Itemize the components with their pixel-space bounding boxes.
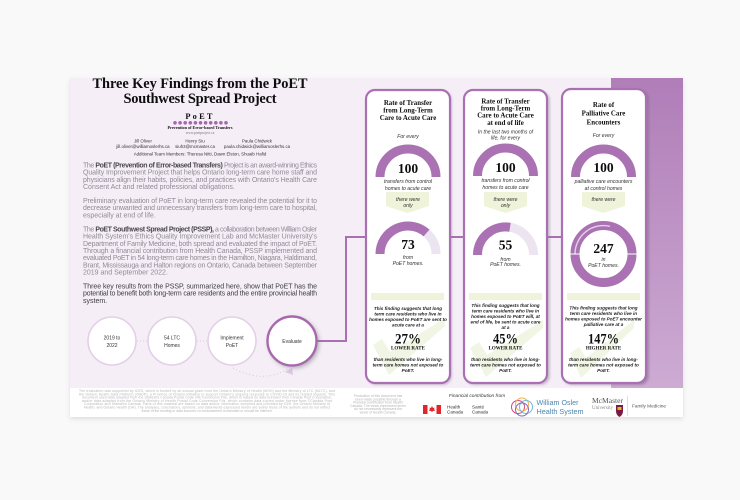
card 2 heading: Rate of Transfer — [481, 98, 530, 106]
key results paragraph: Three key results from the PSSP, summarized here, show that PoET has the — [83, 284, 317, 290]
Health Canada wordmark — [447, 404, 489, 414]
PSSP paragraph: Health System's Ethics Quality Improvement Lab and McMaster University's — [83, 234, 318, 241]
PoET logo: Prevention of Error-based Transfers — [167, 125, 233, 130]
gauge: 247 in PoET homes: 247 — [593, 241, 614, 256]
Health Canada wordmark: Canada — [472, 410, 489, 414]
card 2: transfer at end of life: homes to acute care — [482, 185, 529, 191]
production note: Canada. The views expressed herein — [350, 404, 406, 408]
production note — [350, 394, 406, 414]
funding disclaimer: document used data adapted from the Statistics Canada Postal Code OM Conversion File, which is based on data licensed from Canada Post Corporation, — [82, 396, 332, 400]
chevron: there were only — [484, 192, 527, 213]
card 3: palliative care encounters: For every — [593, 133, 615, 139]
logo: William Osler Health System: William Osler — [536, 398, 579, 407]
preliminary evaluation paragraph — [83, 198, 317, 219]
funding disclaimer: Corporation and Statistics Canada. Parts of this material are based on data and/or information compiled and provided by CIHI, the Ontario Ministry of — [84, 402, 330, 406]
intro paragraph — [83, 162, 318, 191]
team members: Jill Oliver — [134, 138, 152, 144]
card 2 heading: from Long-Term — [481, 106, 531, 112]
step: implement PoET: Implement — [220, 336, 244, 342]
stat: 147% higher rate: HIGHER RATE — [586, 346, 622, 352]
gauge: 100 control transfers — [380, 149, 436, 177]
finding text: term care residents who live in — [472, 308, 539, 314]
comparison text — [568, 357, 639, 373]
team members: Henry Siu — [185, 138, 205, 144]
stat: 147% higher rate: 147% — [588, 332, 619, 348]
funding disclaimer — [79, 389, 335, 413]
team members: siuh3@mcmaster.ca — [175, 144, 215, 149]
timeframe text: life, for every — [491, 136, 521, 142]
finding text: This finding suggests that long — [569, 306, 638, 310]
comparison text: PoET. — [499, 368, 512, 373]
card 1 heading: Rate of Transfer — [384, 100, 432, 107]
stat: 45% lower rate — [489, 332, 523, 352]
card 3 heading — [582, 102, 625, 126]
stat: 45% lower rate: LOWER RATE — [489, 346, 523, 352]
step: evaluate — [268, 316, 319, 368]
PSSP paragraph — [83, 226, 318, 276]
comparison text: PoET. — [402, 368, 415, 373]
funding disclaimer: The evaluation was supported by ICES, which is funded by an annual grant from the Ontario Ministry of Health (MOH) and the Ministry of LTC (MLTC), and — [79, 389, 335, 393]
intro paragraph: physicians align their habits, policies, and practices with Ontario's Health Care — [83, 177, 317, 184]
preliminary evaluation paragraph: decrease unwanted and unnecessary transfers from long-term care to hospital, — [83, 205, 317, 212]
card 2 heading: Care to Acute Care — [477, 112, 534, 120]
production note: do not necessarily represent the — [354, 407, 402, 411]
stat: 45% lower rate: 45% — [493, 332, 518, 348]
card 1: transfer to acute care: PoET homes. — [393, 261, 423, 267]
step: 54 LTC homes — [148, 317, 196, 365]
step: evaluate: Evaluate — [282, 339, 302, 345]
key results paragraph — [83, 284, 317, 305]
finding text — [369, 306, 447, 328]
Health Canada wordmark: Canada — [447, 410, 464, 414]
funding disclaimer: the Ontario Health Data Platform (OHDP), a Province of Ontario initiative to support Ontario's ongoing response to COVID-19 and its related impacts. This — [79, 392, 335, 396]
gauge: 100 control transfers: 100 — [398, 161, 418, 176]
PSSP paragraph: Brant, Mississauga and Halton regions on Ontario, Canada between September — [83, 262, 318, 269]
PSSP paragraph: The PoET Southwest Spread Project (PSSP), a collaboration between William Osler — [83, 226, 318, 234]
stat: 27% lower rate: LOWER RATE — [391, 346, 426, 352]
timeframe text: In the last two months of — [478, 130, 534, 136]
comparison text: term care homes not exposed to — [373, 362, 444, 368]
card 2: transfer at end of life: transfers from control — [481, 178, 530, 184]
team members: Additional Team Members: Theresa Nitti, Dawn Elston, Shuaib Hafid — [134, 152, 267, 156]
comparison text: PoET. — [597, 368, 610, 373]
title: Three Key Findings from the PoET — [92, 76, 308, 92]
finding text — [565, 306, 642, 327]
gauge: 100 control transfers: 100 — [495, 160, 516, 175]
chevron: there were — [582, 192, 625, 213]
funding disclaimer: Health, and Ontario Health (OH). The analyses, conclusions, opinions, and statements expressed herein are solely those of the authors and do not reflect — [84, 406, 330, 410]
PoET logo: www.poetproject.ca — [186, 131, 215, 135]
PSSP paragraph: Through a financial contribution from Health Canada, PSSP implemented and — [83, 248, 317, 255]
finding text: acute care at a — [392, 322, 424, 328]
connector line to cards — [315, 237, 562, 341]
gauge: 100 control transfers — [478, 148, 534, 176]
card 1: transfer to acute care: transfers from control — [384, 179, 433, 185]
gauge: 100 control encounters — [576, 149, 632, 177]
logo: McMaster University: McMaster — [592, 396, 623, 405]
card 1: transfer to acute care — [366, 90, 452, 385]
stat: 27% lower rate: 27% — [395, 332, 421, 348]
comparison text: term care homes not exposed to — [470, 362, 541, 368]
finding text: palliative care at a — [583, 322, 624, 327]
finding text: end of life, be sent to acute care — [471, 320, 541, 324]
logo: Canadian flag — [423, 405, 441, 414]
card 1: transfer to acute care: For every — [397, 134, 419, 140]
gauge: 100 control encounters: 100 — [593, 160, 614, 175]
chevron: there were: there were — [591, 197, 616, 203]
card 3: palliative care encounters: at control homes — [585, 186, 623, 192]
comparison text — [470, 357, 541, 373]
logo: William Osler Health System: Health System — [536, 407, 584, 416]
production note: Production of this document has — [354, 394, 403, 398]
step: 2019 to 2022: 2022 — [106, 343, 118, 349]
finding text: homes exposed to PoET encounter — [565, 316, 642, 322]
gauge: 73 from PoET homes — [380, 226, 436, 254]
intro paragraph: The PoET (Prevention of Error-based Transfers) Project is an award-winning Ethics — [83, 162, 318, 170]
chevron: there were only — [386, 192, 429, 213]
gauge: 247 in PoET homes — [570, 226, 637, 282]
finding text — [471, 303, 541, 330]
step: implement PoET — [208, 317, 256, 365]
card 3: palliative care encounters: in — [602, 257, 606, 263]
funding disclaimer: and/or data adapted from the Ontario Ministry of Health Postal Code Conversion File, which contains data copied under license from ©Canada Post — [82, 399, 332, 403]
card 2: transfer at end of life: PoET homes. — [490, 262, 521, 268]
gauge: 73 from PoET homes: 73 — [401, 237, 415, 252]
production note: been made possible through a — [355, 397, 401, 401]
chevron: there were only: only — [403, 203, 413, 209]
title — [92, 76, 308, 107]
gauge: 55 from PoET homes — [477, 227, 534, 255]
card 3 heading: Rate of — [593, 102, 615, 109]
card 2 heading: at end of life — [487, 120, 524, 127]
card 3: palliative care encounters: palliative care encounters — [574, 179, 633, 185]
logo: McMaster University — [592, 396, 666, 417]
card 1 heading — [380, 100, 436, 122]
finding text: at a — [502, 325, 510, 330]
logo: William Osler Health System — [512, 398, 584, 416]
comparison text: than residents who live in long- — [569, 357, 638, 362]
card 1 heading: Care to Acute Care — [380, 115, 436, 122]
comparison text: term care homes not exposed to — [568, 362, 639, 368]
card 2: transfer at end of life: from — [500, 257, 511, 263]
team members: jill.oliver@williamoslerhs.ca — [115, 144, 170, 149]
PSSP paragraph: 2019 and September 2022. — [83, 270, 168, 276]
slide background — [70, 78, 683, 419]
card 1 heading: from Long-Term — [383, 108, 433, 114]
finding text: homes exposed to PoET are sent to — [369, 317, 447, 322]
step: 2019 to 2022 — [88, 317, 136, 365]
timeframe text — [478, 130, 534, 142]
funding disclaimer: those of the funding or data sources; no endorsement is intended or should be inferred. — [142, 409, 272, 413]
preliminary evaluation paragraph: Preliminary evaluation of PoET in long-term care revealed the potential for it to — [83, 198, 317, 205]
step: 54 LTC homes: Homes — [164, 343, 180, 349]
preliminary evaluation paragraph: especially at end of life. — [83, 212, 156, 219]
comparison text: than residents who live in long- — [374, 357, 443, 362]
title: Southwest Spread Project — [124, 91, 277, 107]
card 3: palliative care encounters — [562, 89, 649, 385]
finding text: term care residents who live in — [570, 311, 637, 316]
Health Canada wordmark: Santé — [472, 404, 484, 410]
gauge: 55 from PoET homes: 55 — [499, 238, 512, 252]
production note: financial contribution from Health — [353, 401, 403, 405]
comparison text: than residents who live in long- — [471, 357, 540, 362]
card 1: transfer to acute care: homes to acute care — [385, 186, 431, 192]
card 1: transfer to acute care: from — [403, 255, 413, 261]
PSSP paragraph: evaluated PoET in 54 long-term care homes in the Hamilton, Niagara, Haldimand, — [83, 255, 317, 262]
finding text: This finding suggests that long — [471, 303, 540, 308]
team members: paula.chidwick@williamoslerhs.ca — [224, 144, 291, 149]
card 2: transfer at end of life — [464, 90, 550, 385]
step: 2019 to 2022: 2019 to — [104, 336, 121, 342]
finding text: This finding suggests that long — [374, 306, 442, 311]
PSSP paragraph: Department of Family Medicine, both spread and evaluated the impact of PoET. — [83, 241, 317, 248]
chevron: there were only: there were — [493, 197, 518, 203]
intro paragraph: Quality Improvement Project that helps Ontario long-term care home staff and — [83, 170, 317, 177]
financial contribution label: Financial contribution from — [449, 393, 505, 399]
PoET logo — [167, 112, 233, 135]
step: 54 LTC homes: 54 LTC — [164, 336, 180, 342]
card 3: palliative care encounters: PoET homes. — [588, 263, 619, 269]
comparison text — [373, 357, 444, 373]
card 3 heading: Encounters — [587, 120, 621, 126]
team members — [115, 138, 291, 156]
production note: views of Health Canada. — [360, 410, 396, 414]
intro paragraph: Consent Act and related professional obligations. — [83, 184, 235, 191]
key results paragraph: system. — [83, 298, 107, 305]
step: implement PoET: PoET — [226, 343, 238, 349]
key results paragraph: potential to benefit both long-term care residents and the entire provincial health — [83, 291, 317, 298]
finding text: homes exposed to PoET will, at — [471, 314, 540, 319]
process timeline — [88, 316, 319, 376]
team members: Paula Chidwick — [242, 138, 273, 144]
stat: 27% lower rate — [391, 332, 426, 352]
Health Canada wordmark: Health — [447, 404, 461, 410]
PoET logo: PoET — [185, 112, 215, 121]
chevron: there were only: only — [501, 203, 511, 209]
finding text: term care residents who live in — [374, 312, 442, 316]
card 3 heading: Palliative Care — [582, 110, 625, 118]
logo: McMaster University: University — [592, 406, 614, 411]
card 2 heading — [477, 98, 534, 127]
logo: McMaster University: Family Medicine — [632, 404, 666, 410]
chevron: there were only: there were — [396, 197, 420, 203]
